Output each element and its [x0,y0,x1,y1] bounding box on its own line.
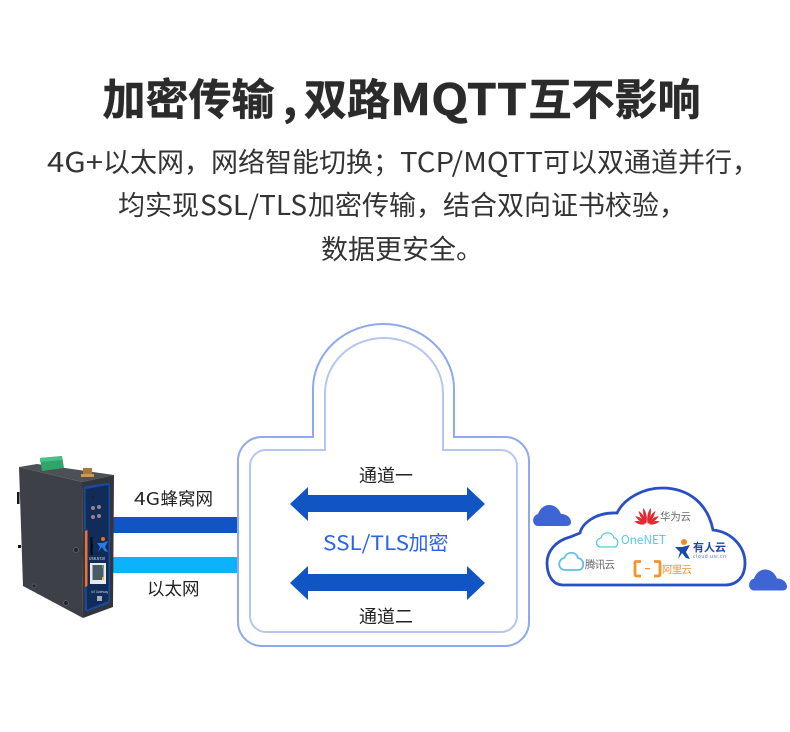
subtitle text block [47,141,759,267]
small cloud left [533,505,571,526]
padlock outline [238,324,529,646]
device top [19,464,114,482]
subtitle text block: 数据更安全。 [321,228,483,267]
title: , [283,66,297,128]
label: 4G cellular: 蜂窝网 [160,486,213,511]
subtitle text block: 可以双通道并行， [543,141,759,180]
connector: antenna [83,468,92,476]
arrow: channel one [290,487,485,521]
logo figure [97,537,108,552]
subtitle text block: 以太网，网络智能切换； [103,141,400,180]
label: channel two: 通道二 [359,603,413,629]
label: SSL/TLS encryption [323,527,448,556]
title: MQTT [390,66,527,128]
label: SSL/TLS encryption: SSL/TLS [323,527,409,556]
title: 互不影响 [528,66,700,128]
din clip [17,492,20,504]
subtitle text block: 均实现 [118,184,199,223]
ethernet port [90,563,106,584]
device left side [19,467,83,618]
orange stripe [85,530,88,587]
logo: Huawei [634,508,660,526]
logo: USR cloud: cloud.usr.cn [693,553,726,560]
logo: OneNET: OneNET [621,531,666,548]
logo: USR cloud: 有人云 [693,539,726,555]
label: 4G cellular: 4G [134,486,160,511]
subtitle text block: 加密传输，结合双向证书校验， [308,184,686,223]
arrow: channel two [290,566,485,600]
label: 4G cellular [134,486,213,511]
ethernet link bar [113,557,239,573]
label: SSL/TLS encryption: 加密 [408,527,448,556]
subtitle text block: 4G+ [47,141,103,180]
label: Huawei cloud: 华为云 [660,509,691,524]
title: 加密传输 [102,66,274,128]
logo: Tencent cloud [559,553,615,572]
model text: USR-N720 [89,557,105,562]
small cloud right [749,570,787,590]
label: ethernet: 以太网 [147,576,200,601]
device: industrial gateway [17,456,114,618]
subtitle text block: SSL/TLS [200,184,307,223]
SIM slot [90,537,93,555]
logo: USR cloud [675,539,726,560]
gateway text: IoT Gateway [91,590,109,594]
subtitle text block: TCP/MQTT [400,141,543,180]
screws [32,548,78,606]
title [102,66,700,128]
logo: OneNET [596,531,666,548]
front panel [84,483,110,611]
logo: Tencent cloud: 腾讯云 [585,557,615,572]
status LEDs [91,496,101,519]
4G link bar [113,517,239,533]
connector: green terminal [40,456,64,471]
main cloud [547,488,745,585]
device front [82,475,114,618]
label: channel one: 通道一 [359,462,413,488]
logo: Aliyun: 阿里云 [662,562,692,577]
title: 双路 [304,66,390,128]
logo: Aliyun [635,562,692,577]
